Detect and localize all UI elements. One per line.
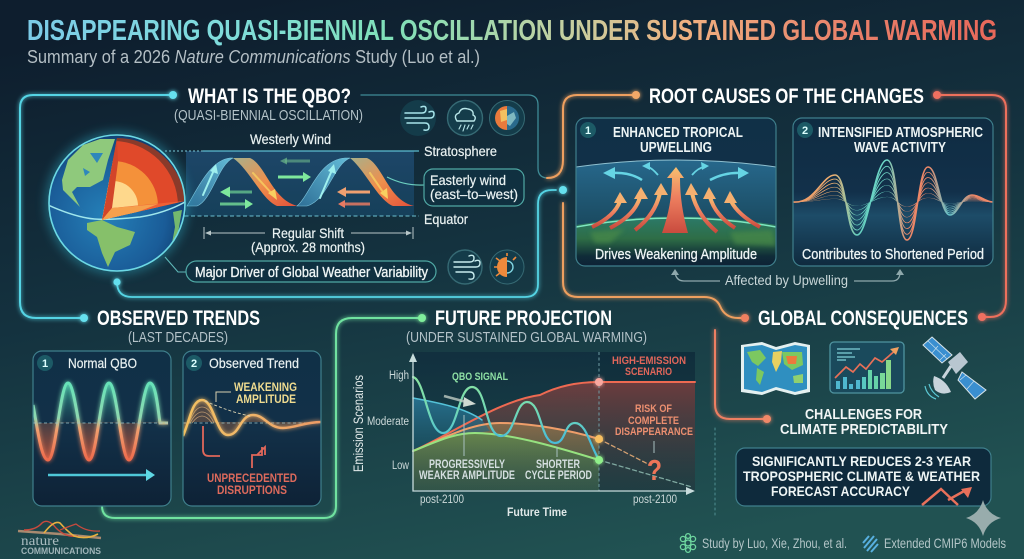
callout: major driver: Major Driver of Global Weather Variability <box>195 265 429 281</box>
callout: forecast accuracy: SIGNIFICANTLY REDUCES 2-3 YEAR <box>752 453 971 469</box>
chart: emission scenarios projection: CYCLE PERIOD <box>525 470 592 482</box>
label: equator: Equator <box>424 211 468 227</box>
subheading: under sustained global warming: (UNDER SUSTAINED GLOBAL WARMING) <box>406 329 647 346</box>
chart: emission scenarios projection: Moderate <box>367 416 409 428</box>
card: enhanced tropical upwelling: 1 <box>585 125 591 137</box>
card: normal QBO: 1 <box>42 358 48 370</box>
chart: emission scenarios projection: Emission Scenarios <box>350 375 366 472</box>
subheading: quasi-biennial oscillation: (QUASI-BIENNIAL OSCILLATION) <box>174 107 363 124</box>
connector nodes <box>80 91 986 423</box>
arrows: affected by upwelling <box>671 269 904 281</box>
callout: forecast accuracy: FORECAST ACCURACY <box>771 483 911 499</box>
chart: emission scenarios projection: HIGH-EMISSION <box>612 355 686 367</box>
callout: forecast accuracy <box>736 448 991 506</box>
connector lines between sections <box>20 95 1006 518</box>
chart: emission scenarios projection: DISAPPEARANCE <box>615 426 693 438</box>
logo: nature communications <box>18 521 101 556</box>
card: enhanced tropical upwelling: UPWELLING <box>640 139 712 156</box>
text: challenges for climate predictability: CLIMATE PREDICTABILITY <box>780 421 948 438</box>
card: enhanced tropical upwelling <box>576 118 776 266</box>
icon: globe cutaway <box>45 130 195 275</box>
text: challenges for climate predictability: CHALLENGES FOR <box>805 406 922 423</box>
heading: observed trends: OBSERVED TRENDS <box>97 307 260 330</box>
callout: major driver <box>165 257 436 282</box>
callout: easterly wind: Easterly wind <box>430 172 506 188</box>
callout: easterly wind <box>424 169 524 206</box>
panel: root causes <box>576 85 993 288</box>
card: observed trend: DISRUPTIONS <box>217 483 287 497</box>
upwelling arrows <box>592 167 760 233</box>
card: normal QBO <box>33 351 171 506</box>
icon: earth climate <box>490 100 524 136</box>
icon: wind <box>400 100 436 136</box>
card: observed trend: Observed Trend <box>209 355 299 371</box>
callout: easterly wind: (east–to–west) <box>430 186 518 202</box>
chart: emission scenarios projection: WEAKER AMPLITUDE <box>419 470 515 482</box>
chart: emission scenarios projection: post-2100 <box>633 494 677 506</box>
card: intensified atmospheric wave activity: WAVE ACTIVITY <box>854 139 946 156</box>
heading: what is the QBO: WHAT IS THE QBO? <box>188 85 351 108</box>
chart: emission scenarios projection: post-2100 <box>420 494 464 506</box>
card: intensified atmospheric wave activity: INTENSIFIED ATMOSPHERIC <box>818 124 983 141</box>
chart: emission scenarios projection: PROGRESSIVELY <box>429 459 505 471</box>
panel: observed trends <box>33 307 321 506</box>
heading: root causes: ROOT CAUSES OF THE CHANGES <box>649 85 924 108</box>
label: approx 28 months: (Approx. 28 months) <box>251 239 365 255</box>
subtitle: Summary of a 2026 Nature Communications Study (Luo et al.) <box>27 47 480 67</box>
chart: emission scenarios projection <box>350 352 695 519</box>
card: observed trend: AMPLITUDE <box>236 392 296 406</box>
card: observed trend: WEAKENING <box>234 380 297 394</box>
chart: emission scenarios projection: RISK OF <box>635 403 672 415</box>
card: intensified atmospheric wave activity: 2 <box>802 125 808 137</box>
icon: satellite <box>923 337 986 399</box>
card: enhanced tropical upwelling: ENHANCED TROPICAL <box>613 124 743 141</box>
chart: emission scenarios projection: SCENARIO <box>625 366 672 378</box>
logo: nature communications: nature <box>21 534 59 549</box>
chart: emission scenarios projection: Low <box>392 460 410 472</box>
icon: rain cloud <box>448 100 482 136</box>
panel: what is the QBO <box>45 85 524 284</box>
card: observed trend: 2 <box>191 358 197 370</box>
chart: emission scenarios projection: COMPLETE <box>628 415 679 427</box>
icon: sparkle <box>966 500 1001 536</box>
label: stratosphere: Stratosphere <box>424 143 497 159</box>
card: intensified atmospheric wave activity: Contributes to Shortened Period <box>802 246 984 263</box>
chart: emission scenarios projection: Future Time <box>507 505 567 519</box>
card: normal QBO: Normal QBO <box>68 355 137 371</box>
chart: emission scenarios projection: ? <box>647 455 662 487</box>
card: intensified atmospheric wave activity <box>793 118 993 266</box>
panel: global consequences <box>736 307 1001 536</box>
arrow: regular shift span <box>204 227 413 239</box>
icon: wind lower <box>448 250 482 284</box>
heading: future projection: FUTURE PROJECTION <box>435 307 612 330</box>
label: regular shift: Regular Shift <box>272 225 344 241</box>
label: affected by upwelling: Affected by Upwelling <box>725 272 848 288</box>
panel: future projection <box>350 307 695 519</box>
text: challenges for climate predictability <box>780 406 948 438</box>
card: observed trend: UNPRECEDENTED <box>207 471 297 485</box>
chart: emission scenarios projection: QBO SIGNAL <box>452 371 508 383</box>
chart: emission scenarios projection: High <box>389 370 409 382</box>
footer: study credit <box>680 534 847 552</box>
subheading: last decades: (LAST DECADES) <box>128 329 228 346</box>
icon: chart with trend <box>830 342 904 393</box>
chart: emission scenarios projection: SHORTER <box>536 459 581 471</box>
icon: sun and weather <box>490 250 524 284</box>
icon: world map <box>741 342 810 395</box>
footer: study credit: Study by Luo, Xie, Zhou, et al. <box>702 535 847 551</box>
card: observed trend <box>183 351 321 506</box>
label: westerly wind: Westerly Wind <box>250 131 331 147</box>
wind diagram <box>165 151 424 216</box>
card: enhanced tropical upwelling: Drives Weakening Amplitude <box>595 246 757 263</box>
logo: nature communications: COMMUNICATIONS <box>21 546 101 556</box>
callout: forecast accuracy: TROPOSPHERIC CLIMATE & WEATHER <box>743 468 980 484</box>
outflow arrows <box>603 162 749 180</box>
heading: global consequences: GLOBAL CONSEQUENCES <box>758 307 968 330</box>
